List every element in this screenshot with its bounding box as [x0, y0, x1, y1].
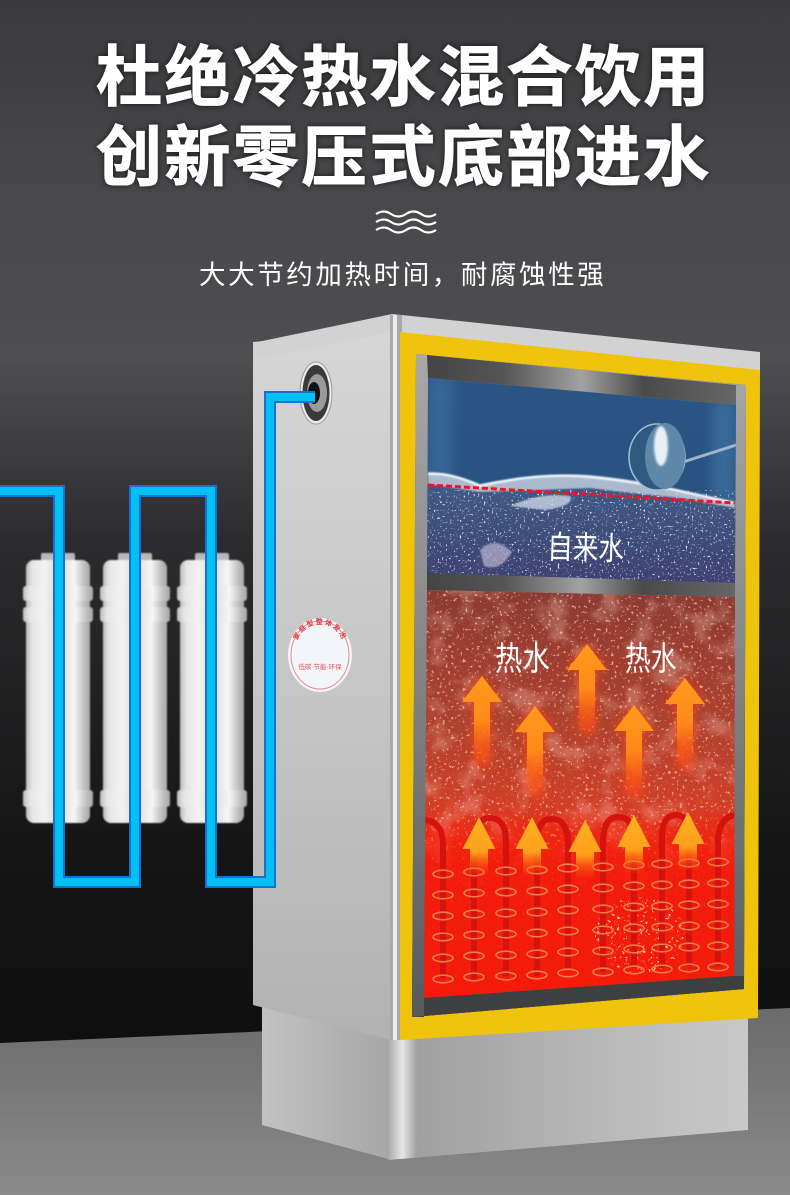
rising heat arrows, lower	[462, 812, 704, 878]
filter cartridges	[23, 553, 247, 823]
icon: round sticker badge: 低碳·节能·环保	[298, 662, 342, 671]
cabinet base	[262, 1000, 748, 1160]
icon: round sticker badge: 家庭型整体发泡	[292, 618, 346, 640]
title heading: 创新零压式底部进水	[96, 120, 712, 194]
icon: float ball with arm	[629, 423, 736, 490]
label: tap water: 自来水	[547, 530, 625, 568]
icon: water inlet fitting	[300, 362, 332, 424]
water body	[427, 474, 735, 590]
cabinet side panel	[253, 330, 392, 1040]
title heading	[96, 40, 712, 194]
red dashed water level line	[428, 485, 735, 503]
cabinet front corner post	[390, 315, 402, 1040]
rising heat arrows, upper	[462, 644, 705, 796]
blue water pipe	[0, 397, 315, 882]
tank inner steel lining	[412, 354, 746, 1017]
labels: hot water	[495, 641, 676, 678]
steel divider shelf	[427, 573, 735, 597]
cabinet top lid	[253, 314, 760, 372]
icon: wave lines	[376, 212, 436, 232]
tank floor	[412, 976, 744, 1017]
speckled patch	[595, 897, 685, 973]
labels: hot water: 热水	[495, 641, 550, 678]
labels: hot water: 热水	[625, 641, 676, 678]
arrow glow halo	[462, 644, 705, 796]
title heading: 杜绝冷热水混合饮用	[96, 40, 712, 114]
heating coils	[422, 815, 738, 983]
subtitle: 大大节约加热时间，耐腐蚀性强	[199, 260, 606, 290]
panel: cold tap water chamber	[427, 378, 736, 583]
glow at heater	[424, 810, 736, 1000]
icon: round sticker badge	[288, 618, 352, 692]
yellow insulation frame	[398, 330, 762, 1042]
panel: hot water chamber	[420, 585, 740, 1000]
water surface foam	[428, 472, 735, 567]
floor surface	[0, 1008, 790, 1195]
